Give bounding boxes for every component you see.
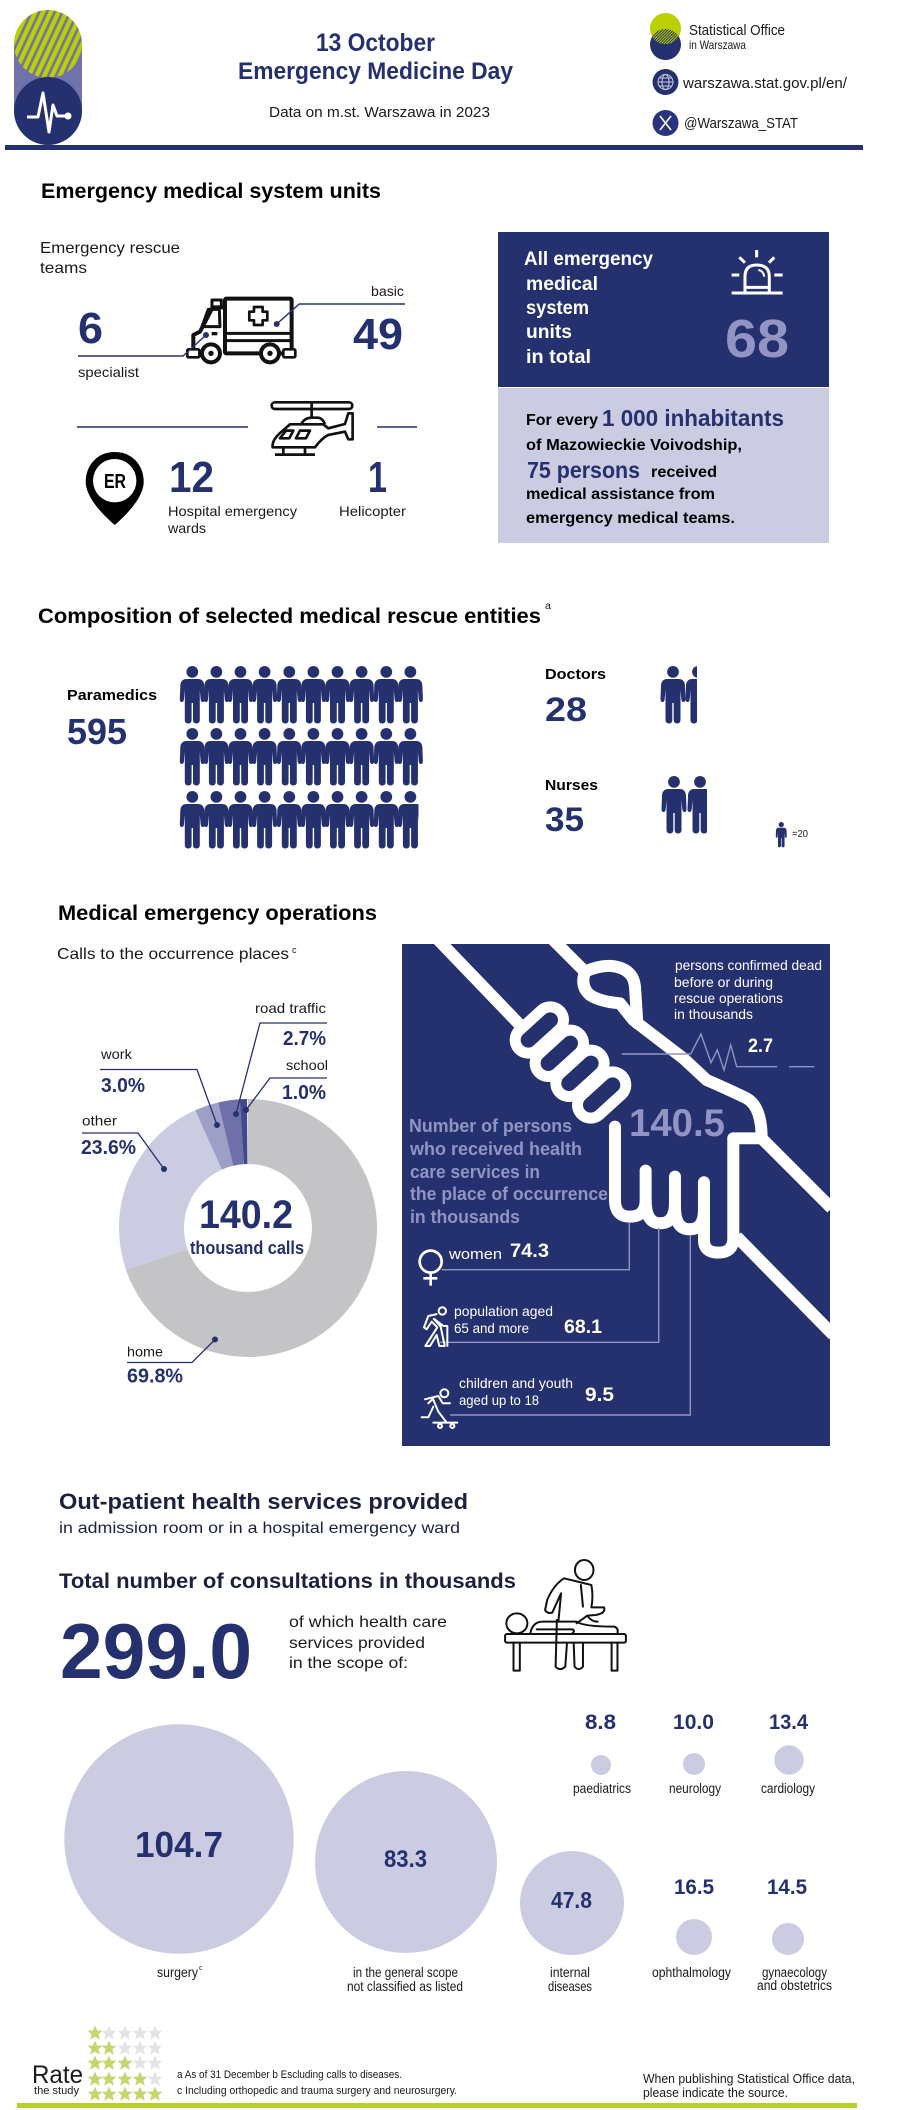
label: other: 23.6% xyxy=(81,1137,136,1159)
callout: basic 49: 49 xyxy=(353,310,403,359)
callout: basic 49 xyxy=(274,283,405,359)
bubble: general scope: 83.3 xyxy=(384,1846,427,1873)
text: all emergency units: medical xyxy=(526,274,598,295)
ECG line xyxy=(622,1034,814,1070)
row: population 65+ xyxy=(424,1303,602,1347)
pictogram: paramedics people xyxy=(180,666,423,848)
panel: paramedics xyxy=(67,666,423,848)
label: school: 1.0% xyxy=(282,1082,326,1104)
website link xyxy=(652,69,848,95)
row: children and youth: children and youth xyxy=(459,1375,573,1391)
text: all emergency units: All emergency xyxy=(524,249,653,270)
X handle: @Warszawa_STAT xyxy=(684,115,798,132)
bubble: paediatrics: 8.8 xyxy=(585,1711,616,1734)
text: number of persons xyxy=(409,1116,608,1227)
label: Emergency rescue teams: teams xyxy=(40,260,87,277)
bubble: paediatrics xyxy=(573,1711,631,1796)
panel: all units total xyxy=(498,232,829,387)
number: 68: 68 xyxy=(725,309,789,369)
bubble: surgery: surgery xyxy=(157,1964,198,1980)
panel: paramedics: Paramedics xyxy=(67,687,157,704)
row: women xyxy=(420,1241,549,1286)
row: population 65+: 65 and more xyxy=(454,1320,529,1336)
panel: doctors: 28 xyxy=(545,691,587,729)
label: work: work xyxy=(100,1046,133,1062)
panel: per 1000 inhabitants: medical assistance from xyxy=(526,486,715,503)
text: persons confirmed dead: in thousands xyxy=(674,1006,753,1022)
text: all emergency units: system xyxy=(526,298,589,319)
bubble: cardiology: cardiology xyxy=(761,1781,815,1796)
bubble: neurology: 10.0 xyxy=(673,1711,714,1734)
footnotes xyxy=(177,2069,457,2097)
subtitle: Data on m.st. Warszawa in 2023 xyxy=(269,104,490,121)
label: work: 3.0% xyxy=(101,1075,145,1097)
panel: persons receiving care xyxy=(402,940,833,1446)
icon: ambulance xyxy=(187,299,295,362)
panel: per 1000 inhabitants: received xyxy=(651,464,717,481)
bubble: gynaecology: gynaecology xyxy=(762,1965,827,1980)
label: school xyxy=(243,1057,328,1113)
section heading: out-patient xyxy=(59,1489,468,1537)
footer: rate the study: Rate xyxy=(32,2061,83,2089)
bubble: surgery: c xyxy=(199,1965,203,1972)
stat: helicopter: Helicopter xyxy=(339,503,406,519)
text: of which: services provided xyxy=(289,1635,425,1652)
illustration: clasped hands xyxy=(438,940,833,1335)
label: other xyxy=(81,1112,167,1172)
number: 299.0: 299.0 xyxy=(60,1607,252,1695)
icon: medical examination xyxy=(505,1560,626,1671)
label: work xyxy=(100,1046,220,1128)
text: persons confirmed dead: 2.7 xyxy=(748,1036,773,1057)
bubble: neurology: neurology xyxy=(669,1781,721,1796)
icon: heartbeat pill xyxy=(14,10,82,145)
subheading: calls: Calls to the occurrence places xyxy=(57,946,289,963)
panel: paramedics: 595 xyxy=(67,711,127,752)
row: children and youth xyxy=(422,1375,614,1428)
icon: emergency beacon xyxy=(732,250,783,293)
label: home: 69.8% xyxy=(127,1366,183,1388)
text: of which: in the scope of: xyxy=(289,1655,408,1672)
panel: per 1000 inhabitants: For every xyxy=(526,412,598,429)
text: persons confirmed dead: persons confirmed dead xyxy=(675,957,822,973)
bubble: ophthalmology: 16.5 xyxy=(674,1876,714,1899)
panel: per 1000 inhabitants: emergency medical teams. xyxy=(526,510,735,527)
text: all emergency units: units xyxy=(526,322,572,343)
row: women: women xyxy=(448,1246,502,1263)
text: all emergency units xyxy=(524,249,653,368)
text: of which xyxy=(289,1614,447,1672)
section heading: units: Emergency medical system units xyxy=(41,180,381,203)
panel: nurses: 35 xyxy=(545,801,584,839)
title xyxy=(238,29,514,85)
row: women: 74.3 xyxy=(510,1241,549,1262)
section heading: composition: a xyxy=(545,601,551,612)
text: persons confirmed dead: before or during xyxy=(674,974,773,990)
panel: per 1000 inhabitants xyxy=(498,388,829,543)
icon: ER location pin: ER xyxy=(104,471,126,493)
heading: total consultations: Total number of consultations in thousands xyxy=(59,1570,516,1593)
logo: Statistical Office xyxy=(650,13,785,60)
bubble: surgery: 104.7 xyxy=(135,1824,223,1865)
panel: per 1000 inhabitants: 1 000 inhabitants xyxy=(602,405,784,431)
label: road traffic xyxy=(233,1000,327,1117)
panel: rescue teams xyxy=(40,240,417,536)
panel: per 1000 inhabitants: of Mazowieckie Voivodship, xyxy=(526,437,742,454)
row: population 65+: population aged xyxy=(454,1303,553,1319)
callout: specialist 6: 6 xyxy=(78,304,103,353)
bubble: neurology xyxy=(669,1711,721,1796)
bubble: cardiology: 13.4 xyxy=(769,1711,808,1734)
bubble: internal diseases: 47.8 xyxy=(551,1887,592,1913)
stat: hospital emergency wards: wards xyxy=(167,520,206,536)
bubble: internal diseases: diseases xyxy=(548,1978,592,1994)
label: road traffic: 2.7% xyxy=(283,1028,326,1050)
section heading: composition: Composition of selected medical rescue entities xyxy=(38,605,541,628)
title: 13 October xyxy=(316,29,435,57)
total: 140.2 xyxy=(199,1193,293,1237)
title: Emergency Medicine Day xyxy=(238,58,514,85)
stat: hospital emergency wards xyxy=(167,453,297,536)
text: number of persons: the place of occurrence xyxy=(410,1184,608,1204)
row: population 65+: 68.1 xyxy=(564,1317,602,1338)
bubble: gynaecology xyxy=(757,1876,832,1993)
bubble: paediatrics: paediatrics xyxy=(573,1781,631,1796)
bubble: gynaecology: and obstetrics xyxy=(757,1978,832,1993)
total xyxy=(190,1193,304,1258)
icon: ER location pin xyxy=(86,452,144,525)
footnotes: c Including orthopedic and trauma surgery and neurosurgery. xyxy=(177,2085,457,2097)
bubble: gynaecology: 14.5 xyxy=(767,1876,807,1899)
callout: specialist 6 xyxy=(78,304,209,380)
row: children and youth: aged up to 18 xyxy=(459,1392,539,1408)
logo: Statistical Office: Statistical Office xyxy=(689,22,785,39)
label: school: school xyxy=(286,1057,328,1073)
bubble: general scope xyxy=(315,1771,497,1994)
X handle xyxy=(652,110,798,136)
rating stars xyxy=(88,2026,162,2101)
source note: please indicate the source. xyxy=(643,2085,788,2100)
source note xyxy=(643,2071,855,2100)
bubble: general scope: not classified as listed xyxy=(347,1978,463,1994)
legend: person equals 20: =20 xyxy=(792,829,808,840)
label: home xyxy=(127,1336,218,1388)
panel: doctors xyxy=(546,666,697,724)
bubble: ophthalmology xyxy=(652,1876,731,1980)
text: all emergency units: in total xyxy=(526,347,591,368)
logo: Statistical Office: in Warszawa xyxy=(689,38,746,52)
source note: When publishing Statistical Office data, xyxy=(643,2071,855,2086)
panel: per 1000 inhabitants: 75 persons xyxy=(527,457,640,483)
callout: basic 49: basic xyxy=(371,283,404,299)
panel: doctors: Doctors xyxy=(545,666,606,683)
text: persons confirmed dead xyxy=(674,957,822,1057)
stat: helicopter: 1 xyxy=(368,453,387,502)
callout: specialist 6: specialist xyxy=(78,364,139,380)
panel: nurses: Nurses xyxy=(545,777,598,794)
panel: nurses xyxy=(546,776,707,834)
stat: hospital emergency wards: 12 xyxy=(169,453,214,502)
label: Emergency rescue teams xyxy=(40,240,180,277)
footer: rate the study xyxy=(32,2026,162,2101)
label: Emergency rescue teams: Emergency rescue xyxy=(40,240,180,257)
header xyxy=(5,10,863,150)
bubble: surgery xyxy=(64,1724,294,1980)
text: of which: of which health care xyxy=(289,1614,447,1631)
section heading: out-patient: in admission room or in a hospital emergency ward xyxy=(59,1520,460,1537)
label: road traffic: road traffic xyxy=(255,1000,326,1016)
label: other: other xyxy=(82,1112,117,1128)
bubble: cardiology xyxy=(761,1711,815,1796)
subheading: calls: c xyxy=(292,945,297,955)
website link: warszawa.stat.gov.pl/en/ xyxy=(682,75,848,92)
text: number of persons: who received health xyxy=(409,1139,582,1159)
text: number of persons: Number of persons xyxy=(409,1116,572,1136)
bubble: internal diseases: internal xyxy=(550,1964,590,1980)
row: children and youth: 9.5 xyxy=(585,1385,614,1406)
bubble: general scope: in the general scope xyxy=(353,1964,458,1980)
section heading: out-patient: Out-patient health services provided xyxy=(59,1489,468,1514)
stat: hospital emergency wards: Hospital emergency xyxy=(168,503,297,519)
number: 140.5: 140.5 xyxy=(629,1102,725,1145)
bubble: ophthalmology: ophthalmology xyxy=(652,1965,731,1980)
section heading: operations: Medical emergency operations xyxy=(58,902,377,925)
legend: person equals 20 xyxy=(776,822,808,847)
text: number of persons: care services in xyxy=(410,1162,540,1182)
bubble: internal diseases xyxy=(520,1851,624,1994)
stat: helicopter xyxy=(339,453,406,519)
footnotes: a As of 31 December b Escluding calls to diseases. xyxy=(177,2069,402,2081)
label: home: home xyxy=(127,1344,163,1360)
donut chart: calls xyxy=(81,1000,344,1388)
text: number of persons: in thousands xyxy=(410,1207,520,1227)
icon: helicopter xyxy=(272,402,353,455)
total: thousand calls xyxy=(190,1238,304,1258)
text: persons confirmed dead: rescue operations xyxy=(674,990,783,1006)
footer: rate the study: the study xyxy=(34,2085,80,2097)
